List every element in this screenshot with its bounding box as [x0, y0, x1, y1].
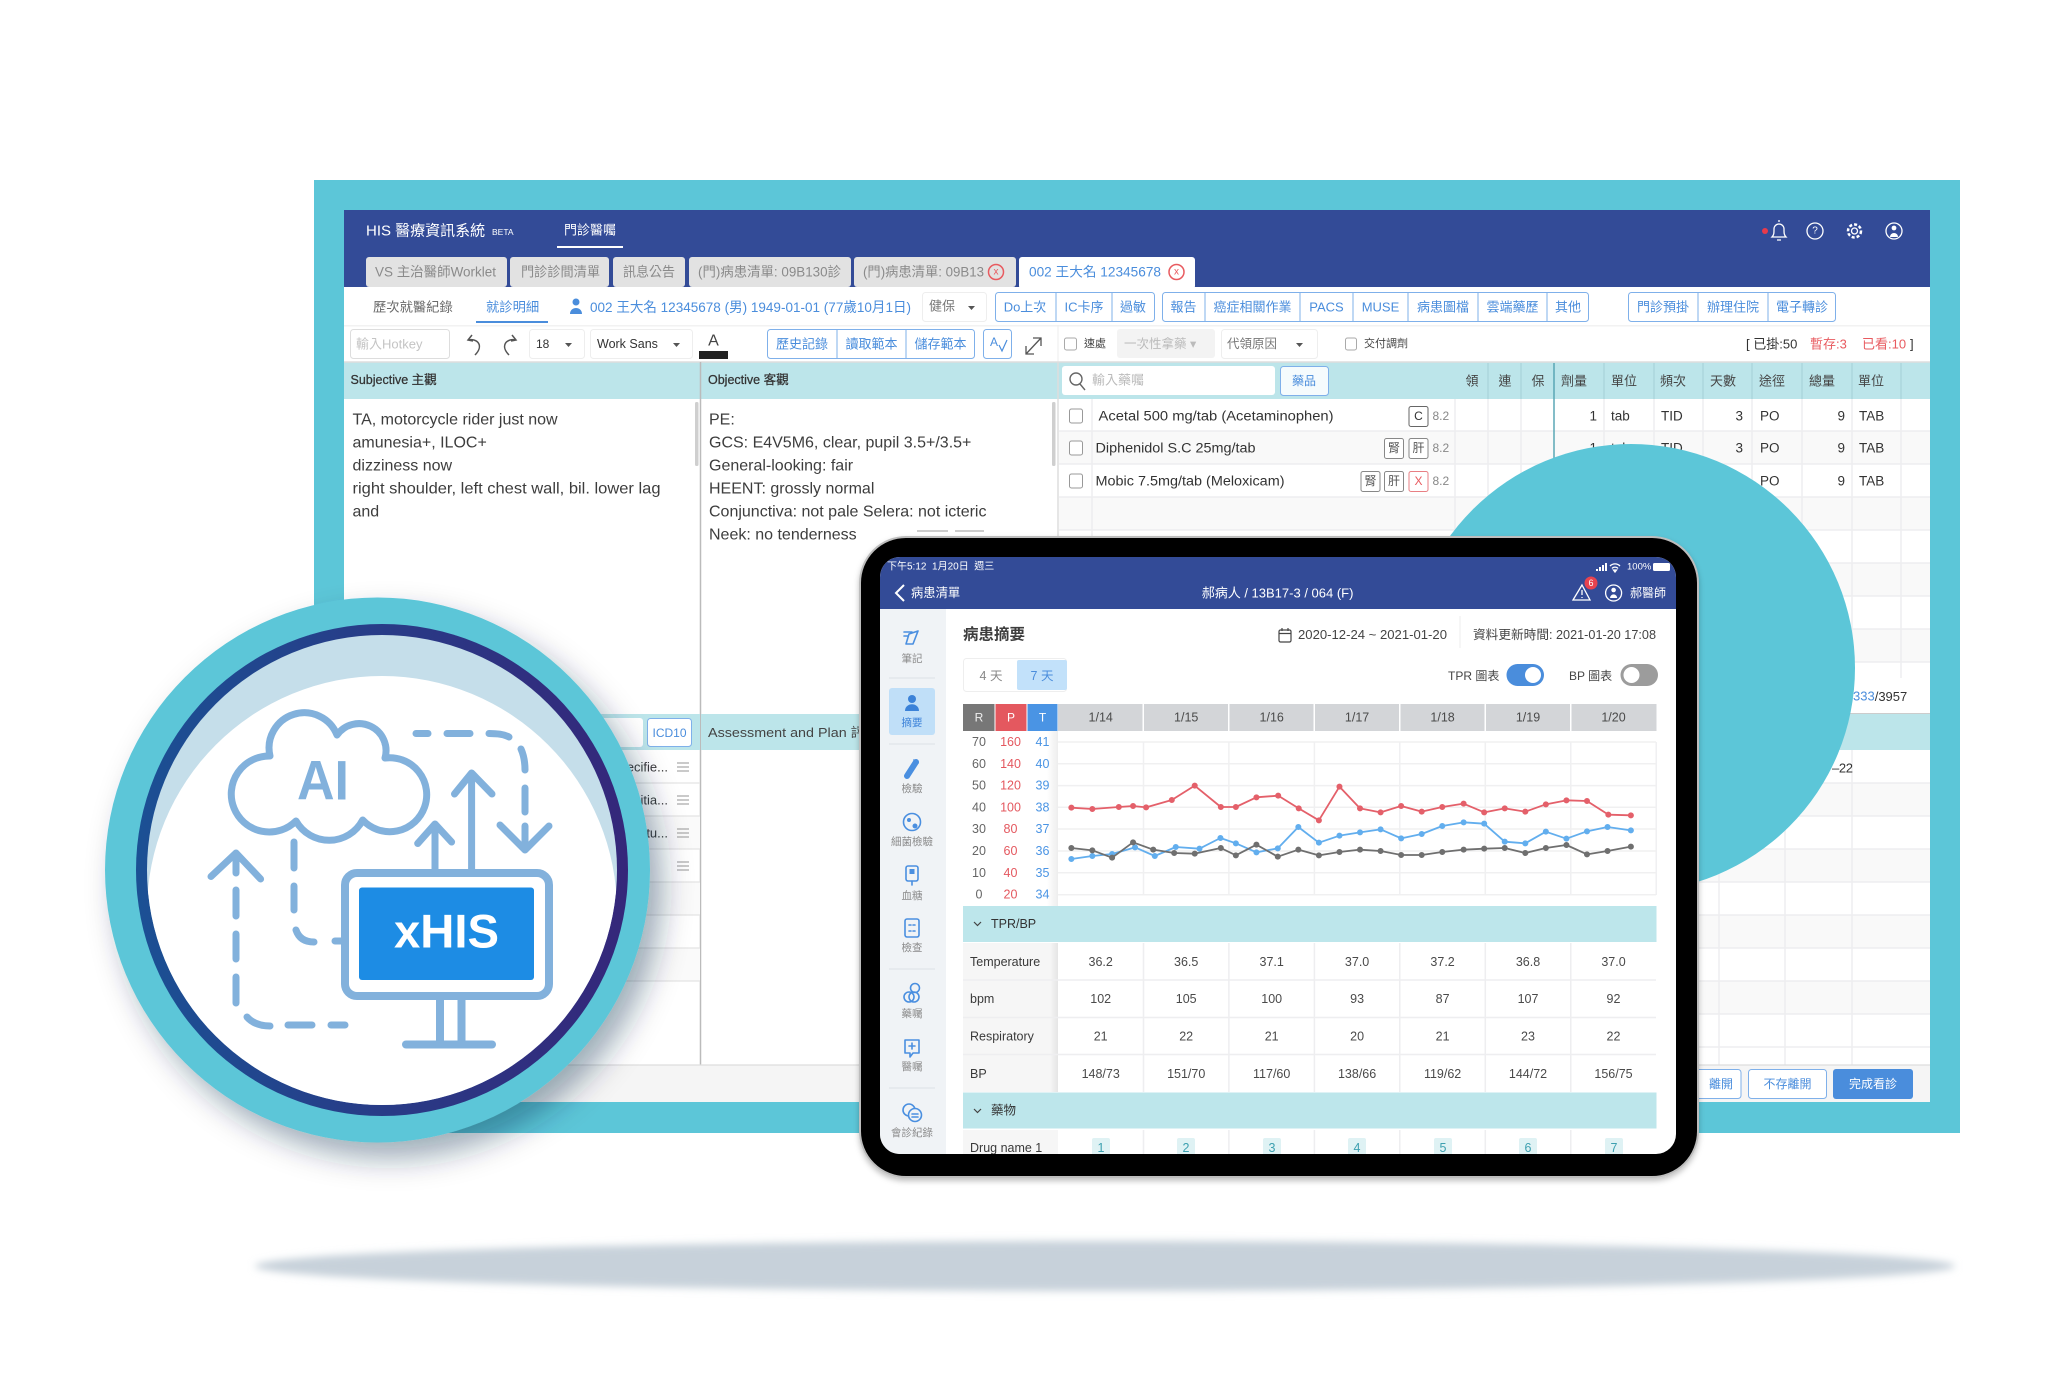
axis scale labels: 35: [1036, 866, 1049, 880]
sidebar item: medication: [902, 984, 922, 1020]
vitals table: 102: [1090, 992, 1111, 1006]
editor toolbar: ]: [1910, 336, 1914, 352]
vitals table: 21: [1265, 1030, 1279, 1044]
editor toolbar: [350, 325, 1914, 363]
vitals table: 93: [1350, 992, 1364, 1006]
medication row 2: 8.2: [1432, 441, 1450, 455]
vitals table: 151/70: [1167, 1067, 1205, 1081]
tab bar: (門)病患清單: 09B130診: [698, 264, 841, 280]
app header bar: HIS 醫療資訊系統: [366, 222, 485, 240]
summary title and date range: [963, 616, 1656, 648]
sidebar item: summary active: 摘要: [902, 716, 922, 729]
editor toolbar: 已看:10: [1862, 336, 1906, 352]
vitals table: 156/75: [1594, 1067, 1633, 1081]
large teal circle behind tablet: [1407, 444, 1855, 892]
tablet nav bar: 郝病人 / 13B17-3 / 064 (F): [1202, 586, 1353, 600]
sidebar item: medication: 藥囑: [902, 1007, 922, 1020]
action button groups: 病患圖檔: [1417, 300, 1469, 314]
app header bar: [344, 210, 1930, 287]
vitals table: 37.2: [1430, 955, 1455, 969]
axis scale labels: 34: [1036, 888, 1049, 902]
vitals table: 37.0: [1345, 955, 1369, 969]
Objective panel: [708, 372, 1056, 544]
medication table: 保: [1531, 374, 1545, 388]
vitals table: Temperature: [970, 955, 1040, 969]
data series: [1071, 786, 1631, 859]
axis scale labels: 41: [1036, 735, 1049, 749]
vitals table: 100: [1261, 992, 1282, 1006]
medication row 1: TAB: [1859, 408, 1884, 424]
bottom action bar: [344, 1065, 1930, 1102]
medication row 3: X: [1414, 474, 1423, 488]
axis scale labels: 36: [1036, 844, 1049, 858]
medication table: 劑量: [1561, 374, 1587, 388]
axis scale labels: 39: [1036, 779, 1049, 793]
medication row 1: tab: [1611, 408, 1630, 424]
icon: AI cloud: AI: [297, 748, 349, 812]
tab bar: 門診診間清單: [521, 264, 600, 280]
floor shadow: [255, 1241, 1955, 1291]
patient info row: 歷次就醫紀錄: [373, 300, 453, 314]
action button groups: 其他: [1555, 300, 1581, 314]
axis scale labels: 37: [1036, 822, 1049, 836]
lower left diagnosis list: Initia...: [630, 792, 668, 808]
vitals table: 21: [1094, 1030, 1108, 1044]
medication row 3: 腎: [1364, 474, 1377, 488]
tablet nav bar: 病患清單: [911, 585, 960, 600]
Objective panel: HEENT: grossly normal: [709, 480, 874, 498]
tab bar: VS 主治醫師Worklet: [375, 264, 496, 280]
medication row 2: tab: [1611, 440, 1630, 456]
medication table: 總量: [1809, 374, 1835, 388]
chart header row: [963, 704, 1656, 731]
medication row 3: 8.2: [1432, 474, 1450, 488]
Objective panel: Objective 客觀: [708, 372, 789, 387]
medication row 3: [1070, 472, 1884, 492]
bottom action bar: 不存離開: [1763, 1077, 1812, 1091]
drug row: 7: [1611, 1141, 1618, 1155]
sidebar item: summary active: [889, 688, 935, 735]
medication row 1: 9: [1837, 408, 1845, 424]
action button groups: IC卡序: [1064, 300, 1104, 314]
vitals table: 22: [1179, 1030, 1193, 1044]
axis scale labels: 160: [1000, 735, 1021, 749]
tab bar: x: [994, 266, 998, 278]
tablet nav bar: 100%: [1627, 562, 1652, 572]
sidebar item: glucose: 血糖: [902, 889, 923, 902]
medication table: 途徑: [1759, 374, 1785, 388]
vitals table: BP: [970, 1067, 987, 1081]
editor toolbar: A: [708, 332, 719, 350]
medication table: [1059, 363, 1930, 678]
sidebar item: lab: 檢驗: [902, 782, 923, 795]
vitals table: 148/73: [1082, 1067, 1120, 1081]
medication row 1: 3: [1735, 408, 1743, 424]
medication row 1: PO: [1760, 408, 1780, 424]
medication row 3: Mobic 7.5mg/tab (Meloxicam): [1096, 474, 1284, 488]
axis scale labels: 38: [1036, 800, 1049, 814]
action button groups: 辦理住院: [1707, 300, 1759, 314]
chart header row: T: [1039, 710, 1047, 724]
Subjective panel: TA, motorcycle rider just now: [352, 412, 558, 428]
tab bar: x: [1174, 266, 1179, 278]
axis scale labels: 70: [972, 735, 986, 749]
medication row 2: 9: [1837, 440, 1845, 456]
arrow: cloud to monitor dashed down: [416, 734, 549, 850]
sidebar item: notes: [902, 631, 923, 665]
medication table: 頻次: [1660, 374, 1686, 388]
chart header row: P: [1007, 710, 1015, 724]
axis scale labels: 60: [972, 757, 986, 771]
editor toolbar: [ 已掛:50: [1746, 336, 1797, 352]
editor toolbar: 一次性拿藥 ▾: [1124, 336, 1197, 351]
sidebar item: glucose: [902, 866, 923, 902]
lower left diagnosis list: [344, 714, 700, 981]
medication row 2: 1: [1589, 440, 1597, 456]
arrow: cloud to monitor dashed left: [294, 842, 343, 942]
summary title and date range: 病患摘要: [963, 624, 1025, 644]
vitals table: 107: [1518, 992, 1538, 1006]
medication row 2: 腎: [1388, 441, 1400, 455]
chart toggles: BP 圖表: [1569, 669, 1612, 683]
axis scale labels: 50: [972, 779, 986, 793]
Subjective panel: right shoulder, left chest wall, bil. lower lag: [352, 480, 660, 498]
medication row 3: 肝: [1388, 474, 1400, 488]
editor toolbar: 輸入Hotkey: [356, 336, 423, 352]
lower right table: –22: [1832, 760, 1853, 776]
medication section header: 藥物: [991, 1104, 1016, 1118]
drug row: 4: [1354, 1141, 1361, 1155]
Subjective panel: dizziness now: [352, 458, 453, 474]
header icons: [1762, 220, 1902, 240]
editor toolbar: 讀取範本: [845, 336, 898, 352]
editor toolbar: 18: [536, 337, 550, 351]
Objective panel: PE:: [709, 412, 735, 428]
medication table: 輸入藥囑: [1092, 372, 1144, 388]
lower left diagnosis list: Unspecifie...: [596, 760, 668, 774]
lower left diagnosis list: Contu...: [622, 826, 668, 840]
medication table: 天數: [1710, 374, 1736, 388]
arrow: dashed loop left: [211, 853, 345, 1026]
editor toolbar: 交付調劑: [1364, 336, 1408, 350]
medication row 3: 9: [1837, 474, 1845, 488]
axis scale labels: 20: [972, 844, 986, 858]
editor toolbar: 代領原因: [1227, 336, 1277, 351]
bottom action bar: 完成看診: [1849, 1076, 1897, 1091]
medication row 1: [1070, 406, 1884, 426]
medication row 3: PO: [1760, 474, 1780, 488]
Subjective panel: Subjective 主觀: [350, 373, 437, 387]
respiration series: [1071, 842, 1631, 858]
chart header row: 1/18: [1430, 710, 1455, 724]
sidebar item: bacteria: 細菌檢驗: [891, 835, 933, 848]
medication table: 單位: [1858, 374, 1884, 388]
vitals table: 21: [1436, 1030, 1450, 1044]
arrow: monitor up short: [418, 824, 452, 870]
tablet nav bar: 6: [1588, 578, 1594, 588]
Subjective panel: [350, 373, 698, 520]
icon: AI cloud: [231, 713, 427, 840]
range segmented control: 7 天: [1031, 669, 1054, 683]
vitals table: 119/62: [1424, 1067, 1461, 1081]
editor toolbar: 暫存:3: [1810, 336, 1847, 352]
Subjective panel: amunesia+, ILOC+: [352, 434, 487, 452]
sidebar item: consult: [891, 1104, 933, 1139]
summary title and date range: 2020-12-24 ~ 2021-01-20: [1298, 628, 1447, 642]
medication row 2: PO: [1760, 440, 1780, 456]
medication row 1: TID: [1661, 408, 1683, 424]
action button groups: [996, 292, 1836, 322]
vitals table: 144/72: [1509, 1067, 1547, 1081]
tab bar: 訊息公告: [623, 264, 675, 280]
editor toolbar: 歷史記錄: [776, 336, 828, 352]
circular xHIS badge: [105, 598, 650, 1146]
action button groups: Do上次: [1004, 300, 1046, 314]
range segmented control: [964, 658, 1067, 692]
chart header row: 1/20: [1601, 710, 1626, 724]
lower right table: [1059, 714, 1930, 1065]
action button groups: 過敏: [1120, 300, 1146, 314]
axis scale labels: 140: [1000, 757, 1021, 771]
vitals table: 36.5: [1174, 955, 1198, 969]
axis scale labels: 20: [1004, 888, 1017, 902]
pulse series: [1071, 786, 1631, 820]
sidebar item: notes: 筆記: [902, 652, 923, 665]
patient info row: 002 王大名 12345678 (男) 1949-01-01 (77歲10月1日): [590, 299, 911, 315]
lower left diagnosis list: ICD10: [652, 726, 687, 740]
axis scale labels: 40: [1004, 866, 1017, 880]
medication table: 單位: [1611, 374, 1637, 388]
axis scale labels: 80: [1004, 822, 1017, 836]
vitals table: 22: [1607, 1030, 1620, 1044]
medication row 2: Diphenidol S.C 25mg/tab: [1096, 440, 1256, 456]
tab bar: (門)病患清單: 09B13: [863, 264, 984, 280]
vitals table: 36.2: [1089, 955, 1113, 969]
page counter: 333/3957: [1853, 688, 1907, 704]
axis scale labels: 40: [972, 800, 986, 814]
tab bar: 002 王大名 12345678: [1029, 264, 1161, 280]
header icons: ?: [1812, 226, 1818, 236]
icon: xHIS monitor: [345, 873, 549, 1044]
chart toggles: [1448, 664, 1658, 686]
medication row 2: 3: [1735, 440, 1743, 456]
action button groups: 報告: [1170, 300, 1197, 314]
drug row: 6: [1525, 1141, 1532, 1155]
vitals table: 37.0: [1601, 955, 1626, 969]
TPR chart: [963, 704, 1656, 906]
medication row 2: 肝: [1412, 441, 1425, 455]
tab bar: [366, 257, 1195, 289]
vitals table: 23: [1521, 1030, 1535, 1044]
drug row: 5: [1440, 1141, 1447, 1155]
app header bar: BETA: [492, 227, 514, 237]
drug row: 2: [1183, 1141, 1190, 1155]
app header bar: 門診醫囑: [564, 222, 616, 238]
patient info row: 就診明細: [486, 300, 539, 314]
chart header row: 1/17: [1345, 710, 1369, 724]
vitals table: 36.8: [1516, 955, 1540, 969]
sidebar item: exam: [902, 919, 922, 954]
Objective panel: General-looking: fair: [709, 458, 854, 474]
medication row 1: Acetal 500 mg/tab (Acetaminophen): [1098, 408, 1334, 424]
axis scale labels: [972, 731, 1058, 906]
medication table: 藥品: [1292, 374, 1316, 388]
temperature series: [1071, 822, 1631, 859]
axis scale labels: 120: [1000, 779, 1021, 793]
chart header row: 1/15: [1174, 710, 1198, 724]
TPR/BP section header: TPR/BP: [991, 917, 1036, 931]
medication section header: [963, 1092, 1656, 1128]
action button groups: MUSE: [1362, 300, 1400, 314]
axis scale labels: 30: [972, 822, 986, 836]
vitals table: Respiratory: [970, 1030, 1035, 1044]
desktop HIS application window: [344, 210, 1930, 1102]
TPR/BP section header: [963, 906, 1656, 942]
Objective panel: Neek: no tenderness: [709, 526, 857, 544]
editor toolbar: 儲存範本: [914, 336, 967, 352]
axis scale labels: 10: [972, 866, 986, 880]
axis scale labels: 100: [1000, 800, 1021, 814]
sidebar item: exam: 檢查: [902, 941, 922, 954]
sidebar item: bacteria: [891, 814, 933, 848]
chart header row: 1/19: [1516, 710, 1540, 724]
vitals table: 37.1: [1260, 955, 1284, 969]
medication row 2: TAB: [1859, 440, 1884, 456]
chart header row: R: [975, 710, 984, 724]
action button groups: 雲端藥歷: [1486, 300, 1539, 314]
axis scale labels: 60: [1004, 844, 1017, 858]
medication row 3: TAB: [1859, 474, 1884, 488]
chart grid: [1058, 742, 1656, 895]
medication row 1: C: [1414, 409, 1423, 423]
sidebar item: consult: 會診紀錄: [891, 1126, 933, 1139]
drug row: [963, 1130, 1623, 1154]
chart toggles: TPR 圖表: [1448, 669, 1499, 683]
medication table: 連: [1498, 374, 1512, 388]
tablet device: [860, 537, 1698, 1177]
Objective panel: Conjunctiva: not pale Selera: not icteric: [709, 504, 986, 520]
vitals table: bpm: [970, 992, 994, 1006]
medication row 2: TID: [1661, 440, 1683, 456]
icon: xHIS monitor: xHIS: [394, 904, 499, 958]
chart header row: 1/14: [1089, 710, 1113, 724]
editor toolbar: 速處: [1084, 336, 1106, 350]
vitals table: [963, 943, 1656, 1092]
action button groups: 癌症相關作業: [1213, 300, 1292, 314]
patient info row: [373, 292, 986, 323]
drug row: Drug name 1: [970, 1141, 1042, 1155]
summary title and date range: 資料更新時間: 2021-01-20 17:08: [1473, 627, 1656, 642]
action button groups: PACS: [1309, 300, 1344, 314]
medication row 1: 8.2: [1432, 409, 1450, 423]
bottom action bar: 離開: [1709, 1077, 1733, 1091]
axis scale labels: 40: [1036, 757, 1049, 771]
action button groups: 電子轉診: [1776, 300, 1828, 314]
teal frame behind the desktop window: [314, 180, 1960, 1133]
patient info row: 健保: [929, 298, 955, 314]
tablet sidebar: [880, 609, 946, 1154]
drug row: 3: [1269, 1141, 1276, 1155]
vitals table: 117/60: [1253, 1067, 1290, 1081]
tablet nav bar: 郝醫師: [1630, 586, 1666, 600]
vitals table: 138/66: [1338, 1067, 1376, 1081]
medication row 1: 1: [1589, 408, 1597, 424]
drug row: 1: [1098, 1141, 1105, 1155]
sidebar item: orders: [902, 1040, 922, 1073]
chart header row: 1/16: [1260, 710, 1284, 724]
Assessment and Plan heading: [701, 714, 1058, 750]
vitals table: 92: [1607, 992, 1620, 1006]
vitals table: 105: [1176, 992, 1197, 1006]
teal column headers: [344, 362, 1930, 399]
editor toolbar: Work Sans: [597, 337, 658, 351]
axis scale labels: 0: [976, 888, 983, 902]
Subjective panel: and: [352, 504, 379, 520]
medication row 2: [1070, 438, 1884, 458]
sidebar item: orders: 醫囑: [902, 1061, 922, 1073]
Assessment and Plan heading: Assessment and Plan 評: [708, 725, 865, 740]
action button groups: 門診預掛: [1637, 300, 1689, 314]
vitals table: 87: [1436, 992, 1450, 1006]
tablet nav bar: 下午5:12 1月20日 週三: [887, 560, 994, 572]
range segmented control: 4 天: [980, 669, 1003, 683]
Objective panel: GCS: E4V5M6, clear, pupil 3.5+/3.5+: [709, 434, 971, 452]
tablet nav bar: [880, 557, 1676, 609]
sidebar item: lab: [902, 760, 923, 795]
medication table: 領: [1465, 374, 1479, 388]
vitals table: 20: [1350, 1030, 1364, 1044]
arrow: monitor up tall: [454, 773, 492, 870]
editor toolbar: A: [990, 335, 998, 349]
